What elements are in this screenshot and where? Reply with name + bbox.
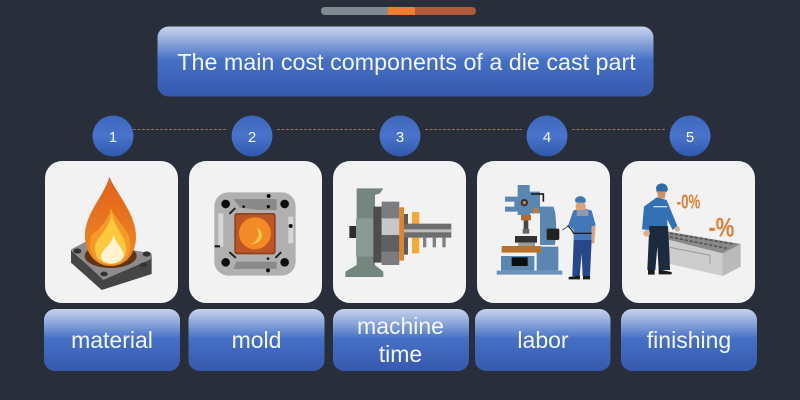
card: machine time xyxy=(333,161,466,303)
label: finishing: finishing xyxy=(647,327,731,353)
percent signs xyxy=(677,192,734,243)
label: machine time: machine xyxy=(357,313,444,339)
label: labor: labor xyxy=(517,327,569,353)
card: material xyxy=(45,161,178,303)
icon: mold block xyxy=(214,192,296,276)
step badge 1 xyxy=(92,116,134,156)
step badge 4 xyxy=(526,116,568,156)
percent signs: -% xyxy=(709,213,734,243)
label: material: material xyxy=(71,327,153,353)
progress bar xyxy=(321,7,476,15)
icon: worker at milling machine xyxy=(497,185,596,279)
step badge 3: 3 xyxy=(396,129,404,146)
step badge 5: 5 xyxy=(686,129,694,146)
step badge 1: 1 xyxy=(109,129,117,146)
label: machine time: time xyxy=(379,341,422,367)
label: labor xyxy=(475,309,610,371)
icon: flame on metal base xyxy=(71,177,152,290)
icon: worker finishing with percent signs xyxy=(642,183,741,276)
title: The main cost components of a die cast part xyxy=(177,49,636,75)
label: finishing xyxy=(621,309,757,371)
step badge 5 xyxy=(670,116,710,156)
label: machine time xyxy=(333,309,469,371)
percent signs: -0% xyxy=(677,192,700,214)
dashed connector xyxy=(133,128,665,130)
card: mold xyxy=(189,161,322,303)
label: mold xyxy=(188,309,324,371)
label: mold: mold xyxy=(232,327,281,353)
icon: machine spindle xyxy=(345,188,451,277)
step badge 2: 2 xyxy=(248,129,256,146)
step badge 3 xyxy=(380,116,420,156)
title xyxy=(158,26,654,96)
card: labor xyxy=(477,161,610,303)
card: finishing xyxy=(622,161,755,303)
step badge 2 xyxy=(232,116,272,156)
label: material xyxy=(44,309,180,371)
step badge 4: 4 xyxy=(543,129,551,146)
